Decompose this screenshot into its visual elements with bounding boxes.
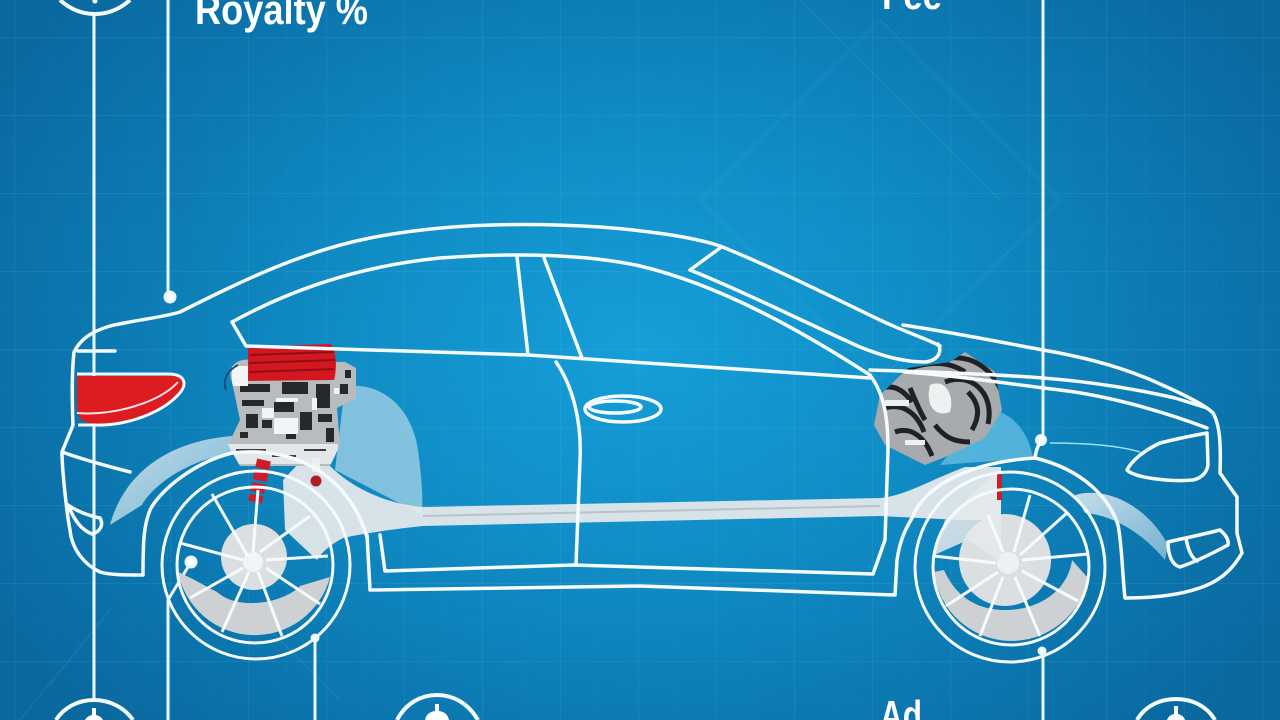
car illustration (62, 225, 1242, 662)
callout lines (94, 0, 1046, 720)
thin highlight line (1050, 443, 1140, 452)
tail light (77, 374, 184, 425)
body outline (62, 225, 1242, 598)
front wheel disc (934, 514, 1088, 641)
icon: bottom centre dollar coin (397, 695, 478, 720)
rear engine (225, 344, 360, 502)
icon: top dollar coin (60, 0, 130, 14)
chassis sill band (283, 450, 1001, 562)
icon: bottom right dollar coin (1137, 699, 1215, 720)
icon: bottom left dollar coin (56, 700, 133, 720)
rear wheel spokes (162, 471, 350, 659)
door handle (585, 396, 661, 422)
front engine (870, 350, 1005, 500)
glass fenders (110, 386, 1168, 560)
front wheel spokes (915, 472, 1105, 662)
rear wheel disc (178, 524, 330, 635)
